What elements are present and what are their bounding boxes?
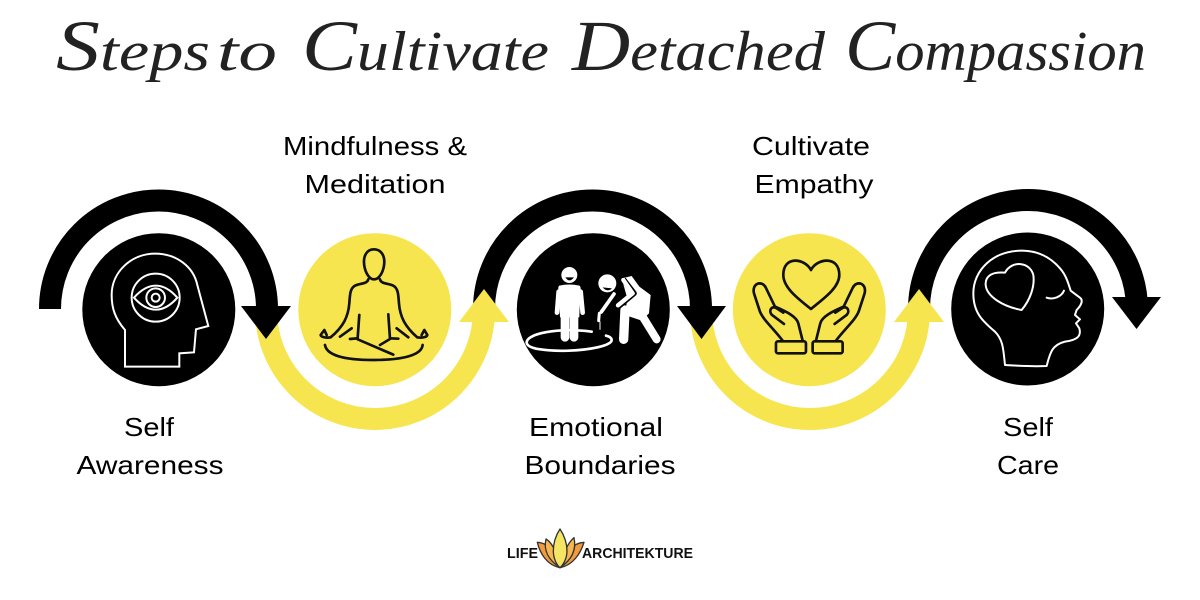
icon: meditation figure [298,233,451,386]
black arc 2 [484,201,701,309]
title: Detached [571,6,826,86]
title [56,6,1146,86]
icon: hands holding heart [733,233,886,386]
title: Compassion [845,6,1146,86]
logo: life architekture: LIFE [507,545,538,562]
yellow arrow 2 [701,289,944,419]
title: Steps [56,6,210,86]
label: cultivate empathy: Empathy [754,169,874,199]
label: self care [997,412,1059,480]
label: emotional boundaries: Emotional [529,412,663,442]
label: mindfulness and meditation: Meditation [304,169,446,199]
black arrowhead 1 [241,306,291,339]
black arc 3 [919,200,1137,309]
label: emotional boundaries: Boundaries [524,450,676,480]
title: to [217,21,277,83]
logo: life architekture [507,529,693,568]
label: self awareness: Self [124,412,175,442]
icon: self awareness head with eye [82,233,235,386]
label: mindfulness and meditation [283,131,467,199]
icon: self care head with heart [951,232,1104,386]
yellow arrow 1 [266,289,509,419]
label: mindfulness and meditation: Mindfulness & [283,131,467,161]
title: Cultivate [302,6,549,86]
black arrowhead 2 [677,306,726,339]
label: self care: Self [1003,412,1054,442]
black arrowhead 3 [1112,297,1161,329]
label: cultivate empathy [752,131,874,199]
label: self awareness: Awareness [76,450,224,480]
label: self awareness [76,412,224,480]
black arc 1 [50,201,267,309]
logo: life architekture: ARCHITEKTURE [582,545,693,562]
label: self care: Care [997,450,1059,480]
label: cultivate empathy: Cultivate [752,131,870,161]
icon: emotional boundaries figures [517,233,670,386]
label: emotional boundaries [524,412,676,480]
